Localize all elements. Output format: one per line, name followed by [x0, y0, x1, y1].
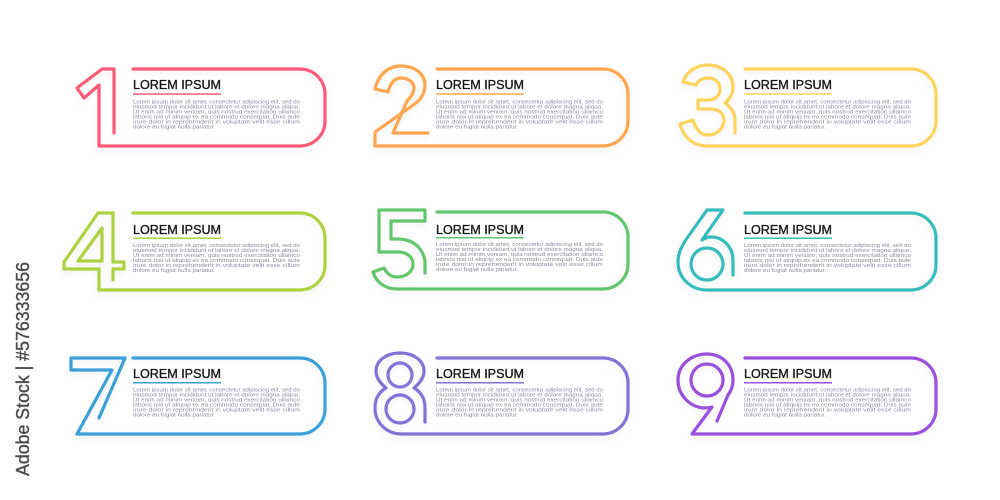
body text: Lorem ipsum dolor sit amet, consectetur adipiscing elit, sed do [436, 100, 603, 106]
body text: Lorem ipsum dolor sit amet, consectetur adipiscing elit, sed do [744, 388, 911, 394]
panel 7: blue [71, 358, 325, 434]
body text: eiusmod tempor incididunt ut labore et dolore magna aliqua. [133, 248, 300, 254]
numeral 6 and card outline [678, 210, 936, 290]
panel 5: green [373, 210, 628, 289]
numeral 4 and card outline [64, 213, 325, 290]
body text: laboris nisi ut aliquip ex ea commodo consequat. Duis aute [744, 258, 911, 264]
numeral 3 and card outline [680, 65, 936, 146]
body text: laboris nisi ut aliquip ex ea commodo consequat. Duis aute [744, 114, 911, 120]
body text: Ut enim ad minim veniam, quis nostrud exercitation ullamco [436, 252, 603, 258]
body text [436, 388, 604, 418]
numeral 2 and card outline [375, 66, 628, 146]
body text: Ut enim ad minim veniam, quis nostrud exercitation ullamco [436, 110, 603, 116]
body text: Ut enim ad minim veniam, quis nostrud exercitation ullamco [133, 398, 300, 404]
body text [744, 243, 912, 274]
body text: irure dolor in reprehenderit in voluptate velit esse cillum [436, 262, 604, 268]
numeral 7 and card outline [71, 358, 325, 434]
body text: Lorem ipsum dolor sit amet, consectetur adipiscing elit, sed do [133, 100, 300, 106]
body text: Ut enim ad minim veniam, quis nostrud exercitation ullamco [744, 398, 911, 404]
panel 2: orange [375, 66, 628, 146]
numeral 8 lower ring [386, 395, 414, 423]
body text: irure dolor in reprehenderit in voluptate velit esse cillum [133, 408, 301, 414]
heading underline [436, 382, 524, 384]
numeral 8 upper ring [388, 363, 412, 387]
stock credit: Adobe Stock | #576333656 [13, 262, 33, 476]
body text: irure dolor in reprehenderit in voluptate velit esse cillum [133, 263, 301, 269]
heading: LOREM IPSUM [436, 366, 524, 381]
body text: Lorem ipsum dolor sit amet, consectetur adipiscing elit, sed do [436, 388, 603, 394]
body text: Lorem ipsum dolor sit amet, consectetur adipiscing elit, sed do [436, 242, 603, 248]
body text: laboris nisi ut aliquip ex ea commodo consequat. Duis aute [133, 402, 300, 408]
body text: Ut enim ad minim veniam, quis nostrud exercitation ullamco [744, 253, 911, 259]
body text: dolore eu fugiat nulla pariatur. [133, 268, 215, 274]
heading: LOREM IPSUM [436, 222, 524, 237]
numeral 6 inner ring [691, 248, 723, 280]
body text: irure dolor in reprehenderit in voluptate velit esse cillum [744, 120, 912, 126]
body text: dolore eu fugiat nulla pariatur. [744, 268, 826, 274]
heading underline [744, 382, 832, 384]
body text: dolore eu fugiat nulla pariatur. [436, 124, 518, 130]
body text: irure dolor in reprehenderit in voluptate velit esse cillum [436, 408, 604, 414]
body text [133, 243, 301, 274]
body text [436, 100, 604, 130]
heading underline [133, 238, 221, 239]
panel 4: lime [64, 213, 325, 290]
heading: LOREM IPSUM [436, 77, 524, 92]
body text: eiusmod tempor incididunt ut labore et dolore magna aliqua. [436, 104, 603, 110]
body text: eiusmod tempor incididunt ut labore et dolore magna aliqua. [436, 392, 603, 398]
heading underline [436, 93, 524, 95]
body text: irure dolor in reprehenderit in voluptate velit esse cillum [744, 263, 912, 269]
body text: eiusmod tempor incididunt ut labore et dolore magna aliqua. [436, 247, 603, 253]
body text: Ut enim ad minim veniam, quis nostrud exercitation ullamco [744, 110, 911, 116]
body text: laboris nisi ut aliquip ex ea commodo consequat. Duis aute [436, 114, 603, 120]
body text: laboris nisi ut aliquip ex ea commodo consequat. Duis aute [133, 114, 300, 120]
body text: eiusmod tempor incididunt ut labore et dolore magna aliqua. [133, 392, 300, 398]
panel 3: yellow [680, 65, 936, 146]
heading: LOREM IPSUM [744, 222, 832, 237]
body text: irure dolor in reprehenderit in voluptate velit esse cillum [133, 120, 301, 126]
body text: irure dolor in reprehenderit in voluptate velit esse cillum [436, 120, 604, 126]
body text: Lorem ipsum dolor sit amet, consectetur adipiscing elit, sed do [133, 243, 300, 249]
body text: dolore eu fugiat nulla pariatur. [436, 412, 518, 418]
heading: LOREM IPSUM [133, 77, 221, 92]
heading underline [133, 382, 221, 384]
body text: eiusmod tempor incididunt ut labore et dolore magna aliqua. [744, 104, 911, 110]
body text: dolore eu fugiat nulla pariatur. [133, 412, 215, 418]
heading underline [744, 238, 832, 239]
body text [133, 388, 301, 418]
body text [744, 388, 912, 418]
body text: eiusmod tempor incididunt ut labore et dolore magna aliqua. [744, 248, 911, 254]
body text: dolore eu fugiat nulla pariatur. [744, 412, 826, 418]
heading: LOREM IPSUM [744, 366, 832, 381]
panel 8: periwinkle [375, 353, 628, 434]
numeral 5 and card outline [373, 210, 628, 289]
numeral 8 and card outline [375, 353, 628, 434]
body text: dolore eu fugiat nulla pariatur. [133, 124, 215, 130]
body text: eiusmod tempor incididunt ut labore et dolore magna aliqua. [133, 104, 300, 110]
numeral 1 and card outline [77, 69, 325, 146]
body text: Lorem ipsum dolor sit amet, consectetur adipiscing elit, sed do [133, 388, 300, 394]
body text: laboris nisi ut aliquip ex ea commodo consequat. Duis aute [436, 257, 603, 263]
body text: eiusmod tempor incididunt ut labore et dolore magna aliqua. [744, 392, 911, 398]
heading: LOREM IPSUM [744, 77, 832, 92]
body text: irure dolor in reprehenderit in voluptate velit esse cillum [744, 408, 912, 414]
numeral 9 inner ring [691, 364, 723, 396]
body text [436, 242, 604, 273]
body text: laboris nisi ut aliquip ex ea commodo consequat. Duis aute [436, 402, 603, 408]
body text [133, 100, 301, 130]
body text: Lorem ipsum dolor sit amet, consectetur adipiscing elit, sed do [744, 100, 911, 106]
body text: Ut enim ad minim veniam, quis nostrud exercitation ullamco [436, 398, 603, 404]
heading underline [133, 93, 221, 95]
body text: dolore eu fugiat nulla pariatur. [436, 267, 518, 273]
body text: Lorem ipsum dolor sit amet, consectetur adipiscing elit, sed do [744, 243, 911, 249]
body text: laboris nisi ut aliquip ex ea commodo consequat. Duis aute [744, 402, 911, 408]
heading underline [436, 237, 524, 238]
panel 9: purple [678, 354, 936, 434]
heading: LOREM IPSUM [133, 222, 221, 237]
body text: dolore eu fugiat nulla pariatur. [744, 124, 826, 130]
body text [744, 100, 912, 130]
body text: Ut enim ad minim veniam, quis nostrud exercitation ullamco [133, 253, 300, 259]
body text: Ut enim ad minim veniam, quis nostrud exercitation ullamco [133, 110, 300, 116]
body text: laboris nisi ut aliquip ex ea commodo consequat. Duis aute [133, 258, 300, 264]
heading underline [744, 93, 832, 95]
panel 1: red [77, 69, 325, 146]
heading: LOREM IPSUM [133, 366, 221, 381]
panel 6: teal [678, 210, 936, 290]
numeral 9 and card outline [678, 354, 936, 434]
